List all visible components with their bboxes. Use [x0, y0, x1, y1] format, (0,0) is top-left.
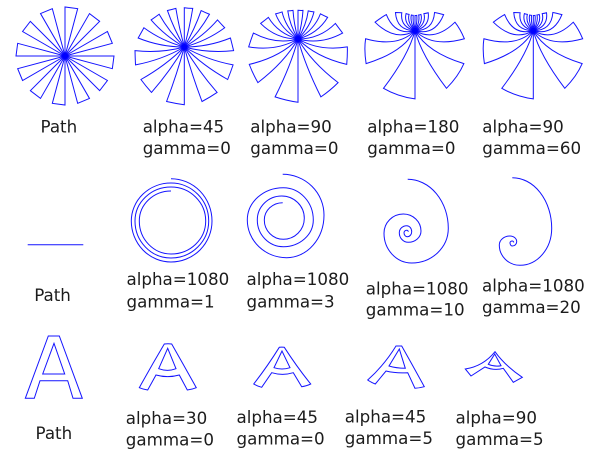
star: bent with spiral: [483, 12, 583, 99]
label: alpha=1080 gamma=10: gamma=10: [366, 300, 465, 320]
panel: star alpha=90 gamma=60: [482, 12, 583, 158]
panel: star alpha=90 gamma=0: [249, 10, 347, 158]
label: alpha=1080 gamma=1: alpha=1080: [126, 269, 229, 289]
star: bent by 45 degrees: [135, 8, 234, 105]
panel: letter A alpha=30 gamma=0: [126, 344, 214, 449]
label: alpha=1080 gamma=10: alpha=1080: [366, 278, 469, 298]
label: alpha=45 gamma=0: alpha=45: [143, 116, 224, 136]
label: alpha=1080 gamma=20: alpha=1080: [482, 276, 585, 296]
label: alpha=45 gamma=5: alpha=45: [345, 407, 426, 427]
label: alpha=1080 gamma=3: alpha=1080: [246, 269, 349, 289]
label: alpha=45 gamma=0: alpha=45: [236, 407, 318, 427]
panel: letter A path: [25, 336, 82, 443]
panel: star path: [16, 7, 114, 136]
panel: spiral alpha=1080 gamma=1: [126, 179, 229, 311]
panel: letter A alpha=45 gamma=5: [345, 346, 433, 448]
star: original wedges: [16, 7, 114, 105]
line: original horizontal path: [28, 244, 83, 246]
letter A: bent by 45 degrees: [254, 347, 311, 387]
label: alpha=1080 gamma=20: gamma=20: [482, 297, 581, 317]
letter A: original outline: [25, 336, 82, 398]
panel: letter A alpha=90 gamma=5: [456, 352, 544, 449]
label: Path: Path: [36, 423, 72, 443]
panel: star alpha=180 gamma=0: [365, 12, 464, 158]
label: alpha=180 gamma=0: alpha=180: [367, 116, 459, 136]
label: alpha=1080 gamma=3: gamma=3: [246, 291, 335, 311]
label: alpha=30 gamma=0: alpha=30: [126, 408, 207, 428]
spiral: gamma 3: [247, 174, 324, 258]
panel: star alpha=45 gamma=0: [135, 8, 234, 158]
letter A: bent by 45 degrees with spiral: [368, 346, 424, 388]
panel: line path: [28, 245, 83, 305]
label: alpha=90 gamma=60: alpha=90: [482, 116, 564, 136]
panel: letter A alpha=45 gamma=0: [236, 347, 325, 448]
label: alpha=90 gamma=0: gamma=0: [250, 138, 338, 158]
label: alpha=45 gamma=5: gamma=5: [345, 428, 433, 448]
label: alpha=45 gamma=0: gamma=0: [143, 138, 231, 158]
panel: spiral alpha=1080 gamma=3: [246, 174, 349, 311]
star: bent by 180 degrees: [365, 12, 464, 99]
spiral: three near-circular turns: [131, 179, 212, 262]
label: alpha=1080 gamma=1: gamma=1: [126, 291, 215, 311]
star: bent by 90 degrees: [249, 10, 347, 102]
label: alpha=45 gamma=0: gamma=0: [236, 428, 325, 448]
label: alpha=180 gamma=0: gamma=0: [367, 138, 455, 158]
label: alpha=90 gamma=0: alpha=90: [250, 116, 332, 136]
letter A: bent by 90 degrees with spiral: [465, 352, 522, 382]
label: alpha=90 gamma=5: gamma=5: [456, 429, 544, 449]
panel: spiral alpha=1080 gamma=20: [482, 178, 585, 317]
label: alpha=90 gamma=5: alpha=90: [456, 407, 537, 427]
letter A: bent by 30 degrees: [139, 344, 196, 390]
label: Path: Path: [34, 285, 71, 305]
label: Path: Path: [40, 116, 77, 136]
label: alpha=30 gamma=0: gamma=0: [126, 429, 214, 449]
spiral: gamma 10: [384, 179, 448, 263]
panel: spiral alpha=1080 gamma=10: [366, 179, 469, 320]
spiral: gamma 20: [499, 178, 552, 265]
label: alpha=90 gamma=60: gamma=60: [482, 138, 581, 158]
